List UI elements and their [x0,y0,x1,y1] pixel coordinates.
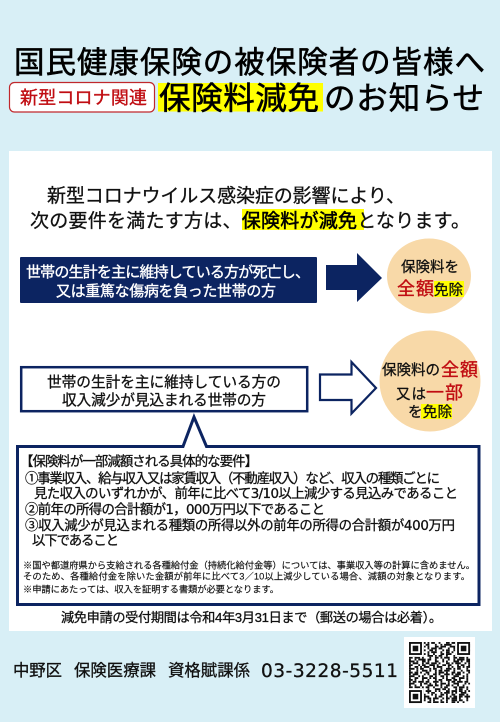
panel: main white area [9,151,492,631]
partial exemption condition box [21,367,307,411]
circle: full exemption [387,238,471,314]
footer contact: 中野区 [13,662,62,680]
footer contact: 保険医療課 [74,662,156,680]
title highlight: premium reduction: 保険料減免 [159,80,319,116]
arrow: solid navy [326,253,382,302]
title line 1: 国民健康保険の被保険者の皆様へ [14,46,485,80]
footer contact: 03-3228-5511 [261,661,398,682]
title line 2 remainder: のお知らせ [324,80,484,116]
requirements list: ①事業収入、給与収入又は家賃収入（不動産収入）など、収入の種類ごとに [25,471,440,486]
circle: full or partial exemption: 全額 [441,360,478,380]
requirements list [20,453,458,548]
badge: COVID related [10,82,154,112]
requirements list: ③収入減少が見込まれる種類の所得以外の前年の所得の合計額が400万円 [25,517,455,534]
full exemption condition box [20,257,317,303]
requirements list: 以下であること [32,533,119,548]
footnotes: ※申請にあたっては、収入を証明する書類が必要となります。 [23,584,279,594]
circle: full or partial exemption [380,330,480,432]
circle: full exemption: 免除 [434,282,464,299]
badge: COVID related: 新型コロナ関連 [20,88,147,108]
partial exemption condition box: 収入減少が見込まれる世帯の方 [62,392,266,409]
full exemption condition box: 世帯の生計を主に維持している方が死亡し、 [26,264,310,281]
footer contact: 資格賦課係 [168,662,250,680]
requirements list: ②前年の所得の合計額が1，000万円以下であること [25,501,325,518]
arrow: outlined navy [320,362,376,414]
footnotes: そのため、各種給付金を除いた金額が前年に比べて3／10以上減少している場合、減額の対象となります。 [23,570,470,582]
partial exemption condition box: 世帯の生計を主に維持している方の [47,374,281,391]
callout: detailed requirements [18,417,479,604]
circle: full or partial exemption: 一部 [426,383,463,403]
QR code [404,637,475,708]
requirements list: 見た収入のいずれかが、前年に比べて3/10以上減少する見込みであること [34,485,458,502]
circle: full exemption: 全額 [397,279,434,299]
footer contact [13,661,398,682]
intro text: 新型コロナウイルス感染症の影響により、 [47,185,405,207]
intro text [30,185,470,232]
footnotes [23,560,475,594]
circle: full or partial exemption: 又は [396,387,426,403]
circle: full or partial exemption: 保険料の [382,362,440,379]
circle: full or partial exemption: を免除 [408,404,452,421]
full exemption condition box: 又は重篤な傷病を負った世帯の方 [56,282,276,300]
application deadline: 減免申請の受付期間は令和4年3月31日まで（郵送の場合は必着）。 [61,609,442,625]
circle: full exemption: 保険料を [401,259,459,276]
header [10,46,485,116]
footnotes: ※国や都道府県から支給される各種給付金（持続化給付金等）については、事業収入等の計算に含めません。 [23,560,475,570]
intro text: 次の要件を満たす方は、保険料が減免となります。 [30,210,470,232]
requirements list: 【保険料が一部減額される具体的な要件】 [20,453,258,469]
